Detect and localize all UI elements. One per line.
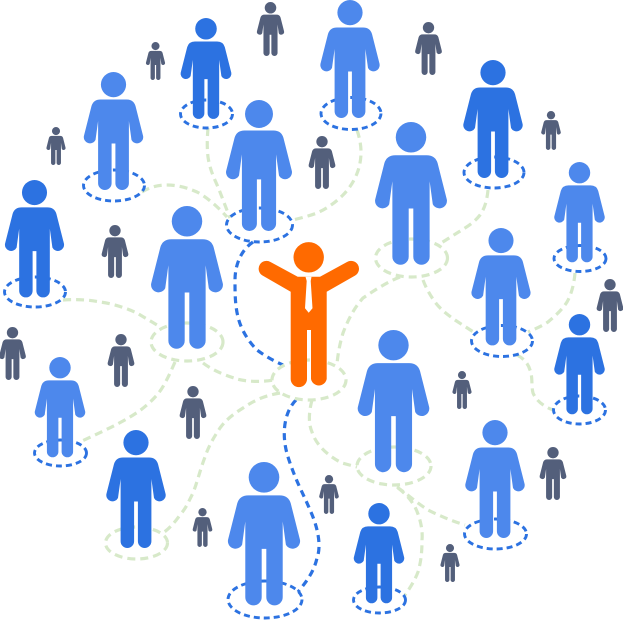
- small figure: [180, 386, 206, 439]
- small figure: [0, 327, 26, 380]
- small figure: [257, 2, 284, 56]
- green connector: left figure to upper centre: [142, 185, 227, 217]
- green connector: centre to lower right tall figure: [309, 400, 357, 467]
- figure: left tall: [151, 206, 223, 361]
- figure: lower left: [34, 357, 86, 466]
- small figure: [193, 508, 212, 547]
- figure: lower right tall: [357, 330, 431, 485]
- figure: far right: [554, 162, 606, 272]
- small figure: [108, 334, 134, 387]
- green connector: centre to right tall figure: [337, 277, 400, 364]
- green connector: lower right tall figure to bottom: [398, 488, 422, 595]
- green connector: right tall figure to upper right: [438, 190, 488, 245]
- figure: upper right: [463, 60, 524, 188]
- green connector: right middle to lower far right: [517, 355, 553, 410]
- green connector: right middle to far right: [528, 273, 575, 332]
- blue connector: centre to bottom figure: [284, 400, 319, 592]
- small figure: [309, 136, 335, 189]
- small figure: [319, 475, 339, 514]
- figure: upper centre: [226, 100, 292, 242]
- small figure: [452, 371, 472, 409]
- ring under central figure: [272, 360, 346, 400]
- figure: right middle: [471, 228, 532, 356]
- figure: right tall: [375, 122, 448, 277]
- figure: upper left: [84, 72, 144, 201]
- green connector: top figure to upper centre: [207, 128, 230, 218]
- small figure: [46, 127, 66, 165]
- small figure: [146, 42, 165, 80]
- green connector: lower left to left tall figure: [80, 362, 175, 442]
- figure: bottom centre: [228, 462, 302, 618]
- figure: lower right: [464, 420, 526, 549]
- figure: bottom: [354, 503, 406, 613]
- figure: bottom left: [106, 430, 168, 559]
- white tie: [305, 277, 312, 313]
- green connector: far left to left tall figure: [63, 300, 157, 325]
- figure: top left: [180, 18, 232, 128]
- small figure: [541, 111, 561, 150]
- small figure: [540, 447, 566, 500]
- orange head: [294, 242, 324, 272]
- connection lines: [63, 128, 575, 595]
- figure: lower far right: [554, 314, 606, 424]
- central orange figure: [259, 242, 359, 400]
- green connector: right tall figure to right middle: [423, 280, 475, 333]
- small figure: [597, 279, 623, 332]
- small figure: [102, 225, 128, 278]
- figure: top centre: [320, 0, 381, 130]
- blue connector: upper centre to centre: [235, 242, 283, 365]
- green connector: centre to bottom left: [163, 393, 280, 533]
- small figure: [415, 22, 442, 75]
- orange body with raised arms: [259, 261, 359, 387]
- green connector: lower right tall figure to lower right: [397, 487, 465, 525]
- figure: far left: [4, 180, 66, 307]
- small figure: [440, 544, 460, 582]
- green connector: top centre to upper centre: [293, 130, 361, 220]
- green connector: left tall figure to centre: [203, 363, 274, 381]
